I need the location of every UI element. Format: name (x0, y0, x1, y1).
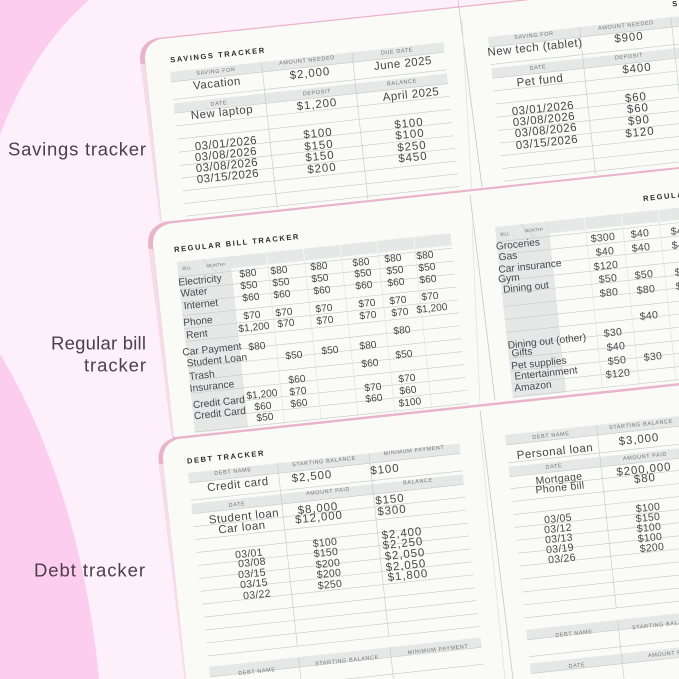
bill amounts: left: $60 (355, 280, 373, 292)
bill amounts: left: $70 (243, 310, 261, 322)
handwritten entries: savings right: 03/08/2026 (514, 122, 578, 140)
bill amounts: left: $60 (387, 277, 405, 289)
table grid: savings left (170, 42, 459, 219)
panel: debt tracker spread (158, 384, 679, 679)
bill names: right: Gifts (511, 346, 533, 360)
bill amounts: left: $50 (395, 349, 413, 361)
handwritten entries: savings right: $120 (625, 126, 655, 140)
bill amounts: left: $70 (421, 291, 439, 303)
bill names: left (178, 273, 248, 422)
bill names: left: Trash (189, 369, 215, 383)
panel: regular bill tracker spread (148, 168, 679, 440)
handwritten entries: savings right: New tech (tablet) (487, 37, 583, 59)
bill amounts: left: $60 (290, 398, 308, 410)
bill amounts: left: $1,200 (238, 321, 270, 335)
bill amounts: right: $50 (598, 272, 618, 286)
column headers: bills right: MONTH> (524, 226, 544, 234)
column headers: debt left: DEBT NAME (238, 667, 276, 677)
bill amounts: right: $120 (605, 367, 631, 381)
label: regular bill tracker: Regular bill (51, 332, 146, 354)
handwritten entries: debt right: $100 (637, 531, 663, 545)
handwritten entries: debt left summary: $100 (370, 463, 400, 477)
handwritten entries: debt right: $200,000 (616, 461, 672, 479)
column headers: savings right: AMOUNT NEEDED (598, 20, 654, 32)
column headers: savings right: DEPOSIT (615, 53, 643, 61)
heading: savings tracker: SAVINGS TRACKER (170, 46, 266, 64)
handwritten entries: debt right: 03/19 (546, 542, 574, 556)
handwritten entries: savings right: $400 (622, 62, 652, 76)
bill amounts: left: $50 (418, 262, 436, 274)
column headers: debt left: MINIMUM PAYMENT (383, 445, 445, 457)
handwritten entries: debt right: Mortgage (535, 471, 583, 487)
label: savings tracker: Savings tracker (8, 138, 146, 160)
handwritten entries: savings right: 03/01/2026 (511, 100, 575, 118)
bill names: right: Amazon (514, 380, 552, 394)
bill amounts: left: $50 (285, 350, 303, 362)
handwritten entries: savings left log: $250 (397, 140, 427, 154)
column headers: savings left: DATE (210, 100, 228, 108)
handwritten entries: debt left log: $100 (312, 536, 338, 550)
column headers: savings left: DUE DATE (381, 47, 413, 57)
handwritten entries: debt left log: 03/15 (238, 567, 266, 581)
handwritten entries: savings left goal: April 2025 (382, 86, 440, 104)
bill amounts: right: $80 (636, 283, 656, 297)
handwritten entries: savings left goal: $1,200 (296, 97, 338, 113)
bill amounts: right (590, 224, 679, 381)
bill names: left: Credit Card (193, 395, 246, 411)
handwritten entries: debt right: $200 (639, 541, 665, 555)
column headers: savings left (196, 47, 417, 108)
column headers: debt left: BALANCE (403, 477, 433, 487)
handwritten entries: savings right (487, 31, 655, 152)
bill amounts: left: $70 (316, 315, 334, 327)
bill amounts: right: $80 (599, 286, 619, 300)
handwritten entries: savings left log (194, 117, 428, 186)
table grid: debt left (188, 444, 485, 679)
handwritten entries: debt left summary: Credit card (207, 476, 269, 494)
handwritten entries: debt left log: 03/15 (240, 577, 268, 591)
bill amounts: left (238, 250, 448, 424)
column headers: savings left: BALANCE (387, 78, 417, 88)
handwritten entries: debt right: 03/05 (544, 512, 572, 526)
bill names: left: Rent (186, 328, 208, 342)
bill amounts: left: $50 (386, 265, 404, 277)
column headers: debt right: DEBT NAME (532, 431, 570, 441)
handwritten entries: debt left log: $2,050 (384, 547, 426, 563)
column headers: bills left (182, 261, 226, 271)
bill amounts: right: $300 (590, 231, 616, 245)
handwritten entries: debt right (516, 432, 672, 566)
handwritten entries: debt left log: $2,050 (385, 558, 427, 574)
handwritten entries: debt left log: $200 (316, 567, 342, 581)
handwritten entries: savings left log: $150 (304, 139, 334, 153)
handwritten entries: savings left goal: June 2025 (373, 55, 433, 73)
bill amounts: left: $60 (254, 401, 272, 413)
bill amounts: left: $80 (352, 257, 370, 269)
background blob: bottom left (0, 354, 99, 679)
handwritten entries: savings right: 03/08/2026 (512, 111, 576, 129)
bill amounts: left: $60 (399, 385, 417, 397)
heading: debt tracker: DEBT TRACKER (187, 448, 265, 466)
handwritten entries: debt left summary: Car loan (218, 520, 266, 536)
bill amounts: left: $70 (359, 310, 377, 322)
background blob: top left (0, 0, 89, 135)
column headers: bills right: BILL (500, 231, 510, 237)
bill amounts: right: $40 (631, 241, 651, 255)
column headers: savings left: SAVING FOR (196, 67, 236, 77)
column headers: debt left: AMOUNT PAID (306, 487, 350, 497)
bill amounts: left: $70 (315, 303, 333, 315)
column headers: debt right: AMOUNT PAID (623, 452, 667, 462)
handwritten entries: savings left log: 03/15/2026 (196, 168, 260, 186)
bill amounts: left: $60 (288, 374, 306, 386)
column headers: debt left: MINIMUM PAYMENT (407, 644, 469, 656)
bill names: left: Electricity (178, 273, 223, 289)
handwritten entries: savings left log: $150 (305, 150, 335, 164)
handwritten entries: savings right: $90 (627, 114, 651, 128)
table grid: debt right (505, 406, 679, 679)
bill amounts: left: $60 (313, 285, 331, 297)
bill amounts: left: $100 (398, 396, 422, 410)
bill names: left: Phone (183, 315, 214, 329)
bill names: left: Car Payment (182, 341, 242, 359)
bill amounts: left: $60 (361, 358, 379, 370)
bill amounts: left: $1,200 (246, 388, 278, 402)
bill amounts: right: $40 (630, 227, 650, 241)
bill amounts: right: $50 (607, 354, 627, 368)
handwritten entries: debt left summary (207, 463, 407, 536)
column headers: savings left: AMOUNT NEEDED (279, 55, 335, 67)
handwritten entries: debt right: $150 (635, 511, 661, 525)
handwritten entries: debt right: 03/13 (545, 532, 573, 546)
handwritten entries: debt left log: $150 (313, 546, 339, 560)
bill amounts: left: $50 (354, 268, 372, 280)
bill amounts: left: $60 (242, 292, 260, 304)
handwritten entries: debt left log: $200 (315, 557, 341, 571)
table grid: bills left (177, 233, 468, 433)
bill names: left: Insurance (189, 379, 235, 395)
handwritten entries: debt left summary: $300 (377, 504, 407, 518)
bill amounts: left: $70 (275, 307, 293, 319)
bill amounts: right: $40 (595, 245, 615, 259)
bill amounts: right: $40 (606, 340, 626, 354)
handwritten entries: debt left log: $2,250 (382, 536, 424, 552)
handwritten entries: debt right: Phone bill (535, 479, 585, 497)
bill amounts: left: $70 (358, 298, 376, 310)
label: regular bill tracker: tracker (84, 354, 146, 376)
bill amounts: left: $70 (277, 318, 295, 330)
bill amounts: left: $80 (359, 340, 377, 352)
label: regular bill tracker (51, 332, 146, 376)
bill names: right: Dining out (503, 280, 550, 296)
table grid: savings right (488, 7, 679, 184)
handwritten entries: savings left log: $100 (395, 128, 425, 142)
handwritten entries: debt right: 03/12 (544, 522, 572, 536)
handwritten entries: debt left log: 03/01 (235, 547, 263, 561)
bill names: left: Student Loan (186, 352, 248, 370)
table grid: bills right (495, 198, 679, 398)
bill amounts: left: $80 (248, 341, 266, 353)
column headers: debt right: STARTING BALANCE (609, 419, 673, 431)
handwritten entries: debt left summary: $150 (375, 493, 405, 507)
bill names: right: Gas (498, 251, 518, 263)
handwritten entries: savings left log: $100 (303, 127, 333, 141)
bill amounts: left: $80 (416, 250, 434, 262)
panel: savings tracker spread (140, 0, 679, 224)
handwritten entries: debt right: $80 (633, 472, 657, 486)
handwritten entries: debt right: $100 (636, 521, 662, 535)
bill amounts: left: $80 (384, 253, 402, 265)
bill amounts: left: $50 (256, 412, 274, 424)
bill names: left: Internet (183, 298, 219, 312)
bill names: right: Pet supplies (511, 356, 567, 372)
bill amounts: left: $50 (272, 277, 290, 289)
handwritten entries: debt left summary: Student loan (208, 507, 280, 527)
handwritten entries: savings left goal (190, 55, 440, 122)
column headers: debt left: STARTING BALANCE (292, 456, 356, 468)
column headers: debt left: DATE (228, 501, 246, 509)
handwritten entries: savings left log: $100 (394, 117, 424, 131)
bill amounts: left: $70 (289, 386, 307, 398)
handwritten entries: savings right: 03/15/2026 (515, 134, 579, 152)
handwritten entries: debt right: $100 (635, 501, 661, 515)
column headers: debt left: STARTING BALANCE (315, 655, 379, 667)
heading: regular bill tracker: REGULAR BILL TRACKER (174, 232, 300, 254)
column headers: debt right: DATE (568, 662, 586, 670)
bill amounts: left: $1,200 (416, 302, 448, 316)
column headers: debt right: DATE (545, 463, 563, 471)
handwritten entries: savings left log: 03/08/2026 (195, 157, 259, 175)
handwritten entries: debt left log (235, 526, 429, 602)
handwritten entries: debt left summary: $12,000 (295, 510, 343, 526)
handwritten entries: savings left log: $200 (307, 162, 337, 176)
handwritten entries: debt right: $3,000 (618, 432, 660, 448)
handwritten entries: savings left log: $450 (398, 151, 428, 165)
column headers: savings right: DATE (529, 64, 547, 72)
handwritten entries: savings right: $60 (626, 102, 650, 116)
bill amounts: left: $50 (311, 273, 329, 285)
handwritten entries: savings left goal: New laptop (190, 104, 254, 122)
bill amounts: left: $70 (364, 382, 382, 394)
bill names: right: Groceries (495, 237, 541, 253)
bill amounts: right: $120 (593, 259, 619, 273)
column headers: savings right: SAVING FOR (514, 31, 554, 41)
handwritten entries: savings left log: 03/08/2026 (194, 146, 258, 164)
bill names: right: Gym (498, 272, 520, 286)
bill amounts: left: $80 (310, 261, 328, 273)
bill amounts: right: $40 (639, 309, 659, 323)
handwritten entries: debt right: 03/26 (548, 552, 576, 566)
column headers: debt left: DEBT NAME (214, 467, 252, 477)
column headers: savings left: DEPOSIT (303, 89, 331, 97)
column headers: bills left: MONTH> (206, 261, 226, 269)
bill names: right: Dining out (other) (507, 332, 587, 352)
handwritten entries: savings left log: 03/01/2026 (194, 135, 258, 153)
handwritten entries: debt left log: $1,800 (387, 568, 429, 584)
handwritten entries: savings right: Pet fund (516, 73, 564, 89)
bill amounts: left: $70 (391, 307, 409, 319)
column headers: savings right (514, 20, 654, 72)
bill amounts: left: $50 (240, 280, 258, 292)
bill amounts: right: $30 (643, 350, 663, 364)
bill amounts: left: $60 (365, 393, 383, 405)
bill amounts: left: $70 (389, 295, 407, 307)
bill amounts: left: $70 (398, 373, 416, 385)
bill amounts: right: $50 (634, 268, 654, 282)
bill amounts: left: $60 (419, 274, 437, 286)
handwritten entries: savings right: $900 (614, 31, 644, 45)
handwritten entries: debt left log: 03/08 (238, 556, 266, 570)
handwritten entries: debt left log: $250 (317, 578, 343, 592)
bill amounts: left: $80 (270, 265, 288, 277)
column headers: debt right (532, 419, 679, 670)
bill amounts: right: $30 (603, 326, 623, 340)
column headers: bills left: BILL (182, 265, 192, 271)
handwritten entries: debt left summary: $8,000 (297, 501, 339, 517)
handwritten entries: savings right: $60 (624, 91, 648, 105)
column headers: debt right: DEBT NAME (555, 629, 593, 639)
bill names: left: Water (180, 286, 209, 300)
bill amounts: left: $50 (321, 345, 339, 357)
handwritten entries: debt left log: $2,400 (381, 526, 423, 542)
handwritten entries: debt right: Personal loan (516, 442, 594, 462)
bill names: left: Credit Card (194, 406, 247, 422)
handwritten entries: debt left log: 03/22 (243, 588, 271, 602)
bill names: right: Car insurance (498, 258, 562, 276)
column headers: debt left (214, 445, 469, 677)
handwritten entries: savings left goal: Vacation (193, 76, 241, 92)
handwritten entries: debt left summary: $2,500 (291, 469, 333, 485)
bill names: right: Entertainment (514, 365, 578, 383)
bill amounts: left: $60 (273, 289, 291, 301)
bill amounts: left: $80 (393, 325, 411, 337)
bill names: right (495, 237, 587, 394)
bill amounts: left: $80 (239, 268, 257, 280)
handwritten entries: savings left goal: $2,000 (289, 66, 331, 82)
column headers: bills right (500, 226, 544, 237)
label: debt tracker: Debt tracker (34, 560, 145, 580)
